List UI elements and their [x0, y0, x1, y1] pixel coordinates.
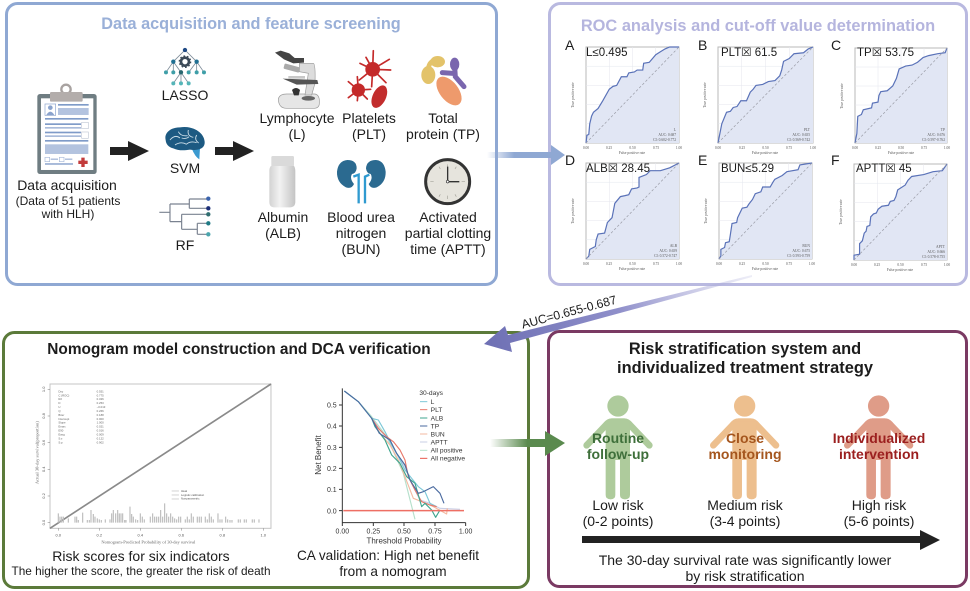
chart: decision curve analysis: L	[431, 399, 435, 406]
chart: ROC E: AUC: 0.675	[792, 249, 810, 253]
icon: medium risk figure	[713, 395, 776, 499]
panel: data acquisition and feature screening	[6, 4, 496, 284]
icon: low risk figure	[587, 395, 649, 499]
text: survival conclusion: The 30-day survival rate was significantly lower	[599, 552, 892, 568]
arrow: data to screening	[110, 141, 149, 161]
chart: ROC B: PLT☒ 61.5	[721, 47, 777, 59]
chart: ROC D: 0.75	[653, 262, 659, 266]
text: data acquisition: Data acquisition	[17, 177, 117, 193]
chart: calibration curve: R2	[58, 397, 62, 401]
text: DCA validation: from a nomogram	[339, 564, 447, 579]
icon: LASSO network	[164, 48, 206, 85]
label: high risk: High risk	[852, 497, 907, 513]
chart: ROC B: PLT	[804, 128, 811, 132]
text: risk scores: Risk scores for six indicators	[52, 548, 230, 564]
chart: calibration curve: 0.6	[41, 439, 46, 445]
heading: nomogram: Nomogram model construction and DCA verification	[47, 341, 431, 358]
icon: clipboard	[37, 85, 97, 174]
chart: calibration curve: Slope	[58, 421, 66, 425]
label: AUC range: AUC=0.655-0.687	[520, 293, 618, 332]
chart: decision curve analysis: 0.25	[367, 529, 380, 536]
chart: decision curve analysis: 1.00	[459, 529, 473, 536]
chart: decision curve analysis: 0.4	[327, 424, 337, 431]
chart: ROC F: 0.50	[897, 263, 904, 267]
chart: ROC D: 0.00	[583, 262, 589, 266]
chart: calibration curve: Eavg	[58, 433, 65, 437]
chart: ROC F: False positive rate	[887, 268, 913, 272]
chart: calibration curve: E90	[58, 429, 64, 433]
chart: calibration curve: Nomogram-Predicted Probability of 30-day survival	[101, 540, 196, 545]
panel: ROC analysis	[550, 4, 966, 284]
chart: decision curve analysis	[314, 388, 473, 545]
text: DCA validation	[297, 548, 479, 579]
chart: decision curve analysis: 0.00	[336, 529, 349, 536]
label: medium risk: (3-4 points)	[710, 513, 780, 529]
chart: ROC F: APTT☒ 45	[856, 163, 912, 175]
heading: risk stratification: individualized treatment strategy	[617, 359, 874, 377]
chart: calibration curve: 0.326	[97, 397, 104, 401]
label: individualized intervention: Individualized	[833, 430, 925, 446]
chart: ROC C: 1.00	[944, 146, 950, 150]
chart: ROC F: 0.25	[874, 263, 880, 267]
chart: calibration curve: 0.266	[97, 409, 104, 413]
chart: ROC D: ALB☒ 28.45	[586, 163, 650, 175]
chart: calibration curve: U	[58, 405, 60, 409]
chart: calibration curve: Logistic calibration	[181, 493, 205, 497]
label: high risk: (5-6 points)	[844, 513, 914, 529]
heading: risk stratification: Risk stratification system and	[629, 340, 861, 358]
chart: calibration curve: Ideal	[181, 489, 187, 493]
chart: calibration curve: 0.188	[97, 413, 104, 417]
heading: ROC analysis: ROC analysis and cut-off value determination	[581, 17, 935, 35]
label: lymphocyte: Lymphocyte	[260, 110, 335, 126]
label: LASSO: LASSO	[162, 87, 208, 103]
chart: ROC E: BUN	[802, 244, 810, 248]
chart: decision curve analysis: 30-days	[419, 390, 444, 397]
label: F: F	[831, 152, 840, 168]
arrow: data to ROC	[487, 145, 565, 165]
chart: ROC A: CI: 0.602-0.772	[653, 138, 676, 142]
label: SVM: SVM	[170, 160, 200, 176]
chart: ROC E: CI: 0.593-0.759	[787, 254, 810, 258]
label: activated partial clotting time: partial clotting	[405, 225, 491, 241]
icon: proteins	[421, 56, 467, 110]
chart: ROC F	[839, 163, 950, 272]
chart: decision curve analysis: BUN	[431, 431, 445, 438]
chart: ROC D: AUC: 0.659	[659, 249, 677, 253]
chart: ROC B: 0.50	[762, 146, 769, 150]
chart: calibration curve: Brier	[58, 413, 64, 417]
label: close monitoring: monitoring	[708, 446, 782, 462]
chart: ROC B: 0.00	[715, 146, 721, 150]
chart: decision curve analysis: 0.75	[428, 529, 442, 536]
chart: ROC F: 0.75	[921, 263, 927, 267]
chart: calibration curve: Emax	[58, 425, 66, 429]
label: RF: RF	[176, 237, 194, 253]
chart: calibration curve: −0.013	[97, 405, 106, 409]
chart: ROC A: 0.75	[653, 146, 659, 150]
arrow: screening to indicators	[215, 141, 254, 161]
chart: decision curve analysis: All negative	[431, 456, 465, 463]
chart: decision curve analysis: 0.50	[397, 529, 411, 536]
chart: ROC D	[571, 163, 682, 271]
chart: ROC C: TP☒ 53.75	[857, 47, 914, 59]
chart: calibration curve: 0.016	[97, 429, 104, 433]
label: B: B	[698, 37, 707, 53]
chart: calibration curve: 1.0	[261, 533, 267, 538]
chart: ROC F: APTT	[936, 245, 946, 249]
icon: clock	[426, 160, 470, 204]
chart: ROC B: True positive rate	[703, 82, 707, 108]
chart: ROC A: 0.00	[583, 146, 589, 150]
label: low risk: Low risk	[592, 497, 645, 513]
label: routine follow-up: follow-up	[587, 446, 649, 462]
chart: calibration curve: S:p	[58, 441, 63, 445]
text: data acquisition	[16, 177, 120, 221]
chart: ROC C	[840, 47, 950, 155]
chart: ROC C: 0.00	[852, 146, 858, 150]
chart: ROC E: 0.75	[786, 262, 792, 266]
chart: calibration curve: 0.4	[41, 466, 46, 472]
chart: ROC E: 1.00	[809, 262, 815, 266]
chart: ROC D: ALB	[670, 244, 678, 248]
chart: ROC A: False positive rate	[619, 151, 645, 155]
chart: calibration curve: Intercept	[58, 417, 70, 421]
chart: decision curve analysis: 0.1	[327, 487, 337, 494]
chart: ROC D: 0.50	[629, 262, 636, 266]
chart: decision curve analysis: 0.3	[327, 445, 337, 452]
label: blood urea nitrogen: Blood urea	[327, 209, 395, 225]
chart: ROC C: False positive rate	[888, 151, 914, 155]
icon: kidneys	[337, 160, 386, 203]
chart: calibration curve: 0.0	[41, 519, 46, 525]
chart: calibration curve: Nonparametric	[181, 497, 200, 501]
chart: calibration curve: 0.2	[41, 492, 46, 499]
text: data acquisition: with HLH)	[41, 207, 94, 221]
chart: ROC D: 1.00	[676, 262, 682, 266]
chart: ROC E: 0.25	[739, 262, 745, 266]
label: total protein: Total	[428, 110, 458, 126]
chart: calibration curve: 0.009	[97, 433, 104, 437]
chart: ROC A	[571, 47, 682, 155]
label: E: E	[698, 152, 707, 168]
label: activated partial clotting time: time (APTT)	[410, 241, 486, 257]
icon: microscope	[275, 51, 319, 108]
icon: RF dendrogram	[159, 196, 210, 236]
chart: decision curve analysis: PLT	[431, 407, 442, 414]
chart: ROC A: 0.25	[606, 146, 612, 150]
chart: calibration curve: 0.775	[97, 393, 104, 397]
label: activated partial clotting time: Activated	[419, 209, 477, 225]
chart: ROC F: 1.00	[944, 263, 950, 267]
chart: ROC A: L	[674, 128, 676, 132]
chart: decision curve analysis: TP	[431, 423, 440, 430]
chart: ROC A: 1.00	[676, 146, 682, 150]
chart: calibration curve: 0.000	[97, 417, 104, 421]
chart: ROC B: 0.25	[739, 146, 745, 150]
label: albumin: (ALB)	[265, 225, 301, 241]
chart: decision curve analysis: APTT	[431, 439, 448, 446]
chart: ROC D: True positive rate	[571, 198, 575, 224]
icon: albumin bottle	[269, 156, 295, 207]
chart: ROC E	[704, 163, 815, 271]
arrow: nomogram to risk	[490, 431, 565, 456]
chart: ROC E: 0.50	[762, 262, 769, 266]
chart: ROC E: False positive rate	[752, 267, 778, 271]
label: blood urea nitrogen: (BUN)	[342, 241, 380, 257]
chart: ROC A: 0.50	[629, 146, 636, 150]
label: platelets: Platelets	[342, 110, 396, 126]
chart: calibration curve	[34, 384, 271, 545]
chart: calibration curve: Actual 30-day survival(proportion)	[34, 421, 39, 484]
chart: ROC B: 0.75	[786, 146, 792, 150]
chart: calibration curve: C (ROC)	[58, 393, 69, 397]
chart: decision curve analysis: All positive	[431, 448, 463, 455]
text: risk scores: The higher the score, the greater the risk of death	[11, 564, 271, 578]
chart: ROC A: L≤0.495	[586, 47, 628, 59]
chart: ROC C: True positive rate	[840, 83, 844, 109]
chart: ROC B: AUC: 0.655	[792, 133, 810, 137]
chart: ROC F: 0.00	[851, 263, 857, 267]
chart: calibration curve: 0.253	[97, 401, 104, 405]
chart: ROC D: False positive rate	[619, 267, 645, 271]
chart: ROC B	[703, 47, 816, 155]
chart: ROC C: TP	[941, 128, 945, 132]
chart: ROC B: CI: 0.569-0.742	[787, 138, 810, 142]
chart: calibration curve: 1.000	[97, 421, 104, 425]
chart: calibration curve: 0.8	[220, 533, 226, 538]
chart: ROC F: True positive rate	[839, 199, 843, 225]
label: total protein: protein (TP)	[406, 126, 480, 142]
chart: decision curve analysis: ALB	[431, 415, 444, 422]
label: D: D	[565, 152, 575, 168]
text: data acquisition: (Data of 51 patients	[16, 194, 120, 208]
chart: calibration curve: D	[58, 401, 60, 405]
label: blood urea nitrogen: nitrogen	[336, 225, 386, 241]
chart: calibration curve: 0.902	[97, 441, 104, 445]
chart: decision curve analysis: Threshold Probability	[366, 536, 441, 545]
chart: ROC E: True positive rate	[704, 198, 708, 224]
chart: ROC C: AUC: 0.676	[927, 133, 945, 137]
chart: decision curve analysis: 0.0	[327, 508, 337, 515]
icon: brain	[165, 127, 205, 159]
chart: ROC C: 0.50	[898, 146, 904, 150]
chart: calibration curve: 0.4	[138, 533, 144, 538]
text: DCA validation: CA validation: High net benefit	[297, 548, 479, 563]
chart: ROC C: CI: 0.597-0.762	[922, 138, 945, 142]
chart: calibration curve: 0.6	[179, 533, 185, 538]
heading: data acquisition: Data acquisition and feature screening	[101, 15, 401, 33]
chart: calibration curve: 0.0	[56, 533, 62, 538]
chart: ROC D: 0.25	[606, 262, 612, 266]
chart: ROC F: CI: 0.578-0.755	[922, 255, 945, 259]
icon: platelets	[348, 51, 391, 110]
chart: calibration curve: S:z	[58, 437, 63, 441]
label: routine follow-up: Routine	[592, 430, 644, 446]
chart: calibration curve: 1.0	[41, 386, 46, 392]
chart: ROC E: 0.00	[716, 262, 722, 266]
chart: ROC A: AUC: 0.687	[658, 133, 676, 137]
label: A: A	[565, 37, 575, 53]
label: medium risk: Medium risk	[707, 497, 784, 513]
chart: ROC C: 0.75	[921, 146, 927, 150]
chart: decision curve analysis: 0.5	[327, 403, 337, 410]
arrow: ROC to nomogram	[484, 275, 752, 352]
chart: decision curve analysis: Net Benefit	[314, 434, 323, 475]
chart: calibration curve: 0.122	[97, 437, 104, 441]
text: survival conclusion: by risk stratification	[685, 568, 805, 584]
panel: risk stratification	[548, 332, 966, 586]
text: risk scores	[11, 548, 271, 578]
chart: calibration curve: Q	[58, 409, 61, 413]
chart: ROC C: 0.25	[875, 146, 881, 150]
chart: ROC A: True positive rate	[571, 82, 575, 108]
chart: calibration curve: 0.2	[97, 533, 103, 538]
chart: calibration curve: 0.8	[41, 412, 46, 419]
label: individualized intervention: intervention	[839, 446, 919, 462]
chart: ROC E: BUN≤5.29	[721, 163, 774, 175]
label: platelets: (PLT)	[352, 126, 386, 142]
chart: ROC F: AUC: 0.666	[927, 250, 945, 254]
label: low risk: (0-2 points)	[583, 513, 653, 529]
label: lymphocyte: (L)	[288, 126, 306, 142]
chart: calibration curve: Dxy	[58, 389, 64, 393]
label: albumin: Albumin	[258, 209, 308, 225]
arrow: increasing risk	[582, 530, 940, 550]
chart: calibration curve: 0.021	[97, 425, 104, 429]
panel: nomogram and DCA	[4, 332, 528, 588]
chart: calibration curve: 0.551	[97, 389, 104, 393]
chart: ROC B: False positive rate	[752, 151, 778, 155]
icon: high risk figure	[847, 395, 910, 499]
label: C: C	[831, 37, 841, 53]
label: close monitoring: Close	[726, 430, 764, 446]
chart: decision curve analysis: 0.2	[327, 466, 337, 473]
chart: ROC B: 1.00	[810, 146, 816, 150]
chart: ROC D: CI: 0.572-0.747	[654, 254, 677, 258]
